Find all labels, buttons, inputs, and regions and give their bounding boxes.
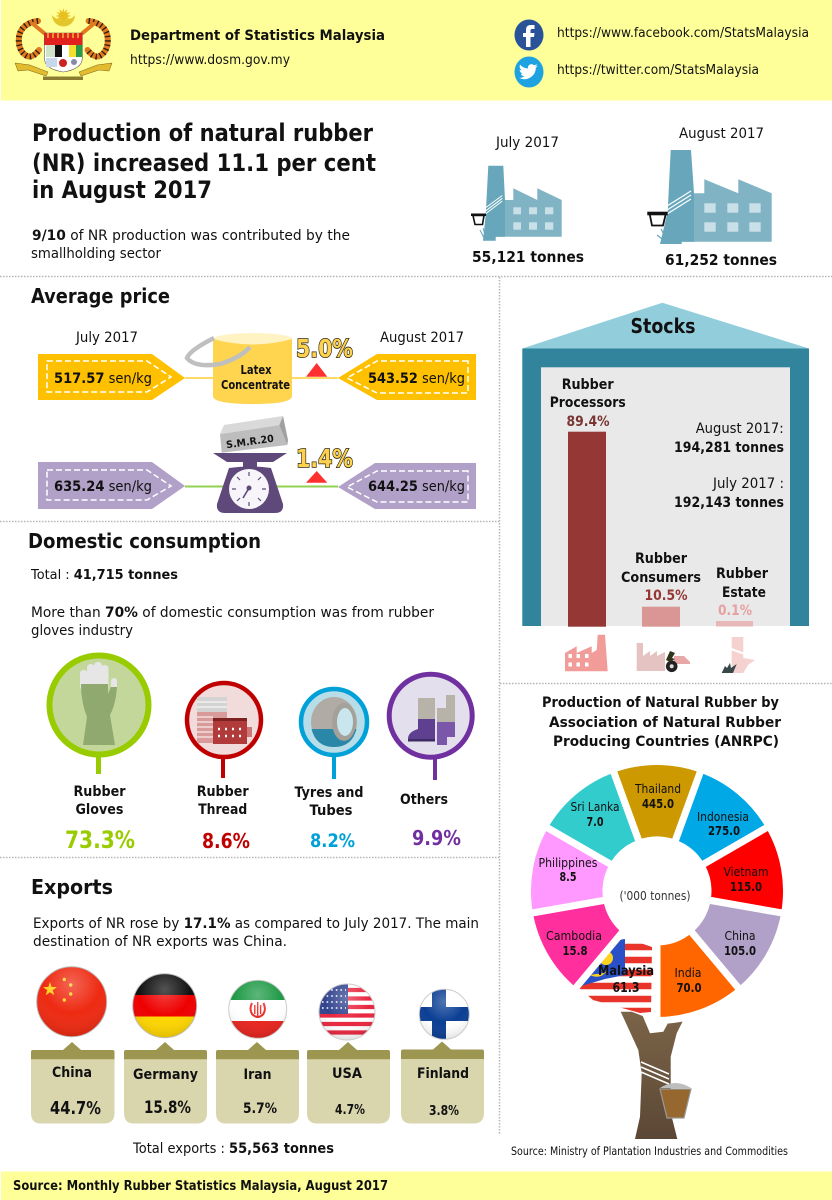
segment: Thailand	[613, 761, 701, 843]
bar: rubber processors	[568, 432, 606, 627]
label: rubber thread: Rubber	[197, 784, 249, 800]
panel: average price	[31, 284, 476, 513]
segment: Sri Lanka	[540, 763, 660, 883]
icon: rubber block on scale	[213, 416, 288, 513]
panel: stocks warehouse	[522, 303, 809, 673]
label: Vietnam: 115.0	[730, 879, 762, 894]
card: Finland	[401, 1042, 484, 1124]
heading: ANRPC production: Production of Natural Rubber by	[542, 695, 779, 711]
label: India	[674, 965, 702, 995]
icon: processors factory	[565, 635, 608, 671]
flag: China	[36, 966, 108, 1038]
label: India: India	[674, 965, 702, 980]
label: July 2017 price: July 2017	[75, 330, 138, 346]
heading: ANRPC production: Association of Natural Rubber	[549, 715, 782, 731]
label: tyres and tubes: Tubes	[310, 803, 352, 819]
sub-headline: smallholding share: 9/10 of NR production was contributed by the	[32, 228, 350, 244]
panel: ANRPC production	[511, 695, 792, 1158]
card: Iran	[216, 1042, 299, 1124]
label: Philippines: Philippines	[538, 855, 598, 870]
label: Indonesia	[697, 809, 749, 838]
label: Sri Lanka: Sri Lanka	[570, 799, 620, 814]
label: Malaysia: 61.3	[612, 981, 640, 996]
icon: factory August	[647, 150, 772, 244]
tag: SMR20 July: 635.24 sen/kg	[54, 479, 152, 495]
text: exports summary: destination of NR exports was China.	[33, 934, 287, 950]
text: July stocks	[674, 476, 784, 511]
footer band: Source: Monthly Rubber Statistics Malaysia, August 2017	[13, 1178, 388, 1194]
label: rubber estate: Rubber	[716, 566, 768, 582]
card: China: 44.7%	[50, 1098, 101, 1119]
label: rubber gloves: Gloves	[76, 802, 124, 818]
change: SMR20 up 1.4%	[296, 444, 353, 483]
label: rubber processors	[550, 377, 626, 430]
label: rubber processors: Processors	[550, 395, 626, 411]
label: tyres and tubes	[294, 785, 364, 819]
segment: Malaysia flag	[580, 939, 652, 1013]
icon: factory July	[471, 166, 562, 241]
label: India: 70.0	[676, 980, 702, 995]
headline: Production of natural rubber	[32, 119, 373, 147]
text: exports summary	[33, 916, 479, 950]
tag: SMR20 August: 644.25 sen/kg	[368, 479, 465, 495]
label: August 2017 production: August 2017	[679, 126, 764, 142]
segment: Vietnam	[696, 825, 792, 926]
label: others: Others	[400, 792, 448, 808]
footer band	[1, 1172, 832, 1200]
card: USA: 4.7%	[335, 1103, 365, 1118]
value: tyres 8.2%: 8.2%	[310, 830, 355, 852]
value: August production: 61,252 tonnes	[665, 251, 777, 269]
flag: Iran	[228, 980, 288, 1041]
label: rubber processors: 89.4%	[566, 414, 610, 430]
label: rubber processors: Rubber	[562, 377, 614, 393]
card: Iran: 5.7%	[243, 1101, 277, 1117]
text: August stocks: 194,281 tonnes	[674, 440, 784, 456]
text: July stocks: 192,143 tonnes	[674, 495, 784, 511]
segment: India	[632, 921, 743, 1028]
label: rubber estate: Estate	[722, 585, 766, 601]
label: Cambodia	[546, 928, 602, 958]
headline: (NR) increased 11.1 per cent	[32, 149, 376, 177]
segment: China	[676, 877, 791, 994]
bar: rubber consumers	[642, 607, 680, 627]
icon: rubber block on scale: S.M.R.20	[226, 434, 275, 451]
label: Cambodia: 15.8	[562, 943, 588, 958]
total exports: Total exports : 55,563 tonnes	[132, 1141, 334, 1157]
icon: tyres and tubes	[301, 689, 367, 779]
tag: latex July	[38, 354, 185, 400]
label: rubber thread: Thread	[198, 802, 247, 818]
segment: Cambodia	[523, 877, 638, 994]
card: USA	[307, 1042, 390, 1124]
tag: SMR20 July	[38, 462, 185, 509]
total consumption: Total : 41,715 tonnes	[30, 567, 178, 583]
icon: facebook	[514, 20, 544, 50]
flag: USA	[318, 984, 376, 1040]
flag: Finland	[419, 989, 470, 1040]
icon: other rubber products	[389, 674, 472, 780]
label: rubber thread	[197, 784, 249, 818]
text: gloves share	[31, 605, 434, 639]
label: Philippines: 8.5	[560, 869, 576, 884]
donut chart	[522, 761, 792, 1028]
label: Thailand	[634, 781, 681, 811]
headline: in August 2017	[32, 176, 212, 204]
card: Germany	[124, 1042, 207, 1124]
text: gloves share: gloves industry	[31, 623, 133, 639]
icon: consumers factory and tyre	[637, 643, 690, 672]
label: rubber consumers: 10.5%	[644, 588, 688, 604]
header band	[1, 0, 832, 100]
label: rubber consumers: Rubber	[635, 551, 687, 567]
label: Vietnam: Vietnam	[724, 864, 768, 879]
panel: domestic consumption	[28, 529, 472, 854]
value: others 9.9%: 9.9%	[412, 826, 461, 850]
card: Finland: 3.8%	[429, 1104, 459, 1119]
headline	[32, 119, 376, 204]
tag: latex July: 517.57 sen/kg	[54, 371, 152, 387]
tag: latex August	[338, 354, 476, 400]
label: rubber consumers	[621, 551, 701, 604]
card: Finland: Finland	[417, 1066, 469, 1082]
change: latex up 5.0%: 5.0%	[296, 334, 353, 363]
connector: SMR 20	[185, 486, 338, 488]
heading: domestic consumption: Domestic consumption	[28, 529, 261, 553]
label: Vietnam	[724, 864, 768, 894]
warehouse roof	[522, 303, 809, 348]
icon: rubber tree trunk	[621, 1012, 691, 1139]
flag: Germany	[132, 973, 198, 1038]
label: rubber consumers: Consumers	[621, 570, 701, 586]
warehouse frame	[522, 348, 809, 626]
card: USA: USA	[332, 1066, 362, 1082]
label: Sri Lanka: 7.0	[586, 814, 604, 829]
card: Germany: 15.8%	[144, 1098, 191, 1117]
facebook link: https://www.facebook.com/StatsMalaysia	[557, 26, 809, 41]
label: China: China	[724, 928, 756, 943]
label: August 2017 price: August 2017	[380, 330, 464, 346]
label: Thailand: 445.0	[642, 796, 674, 811]
value: gloves 73.3%: 73.3%	[65, 826, 135, 854]
icon: Malaysia coat of arms	[15, 8, 112, 80]
icon: estate tree	[722, 637, 755, 673]
segment: Indonesia	[654, 763, 774, 883]
label: rubber estate: 0.1%	[718, 603, 752, 619]
sub-headline: smallholding share	[31, 228, 350, 262]
heading: exports: Exports	[31, 875, 113, 899]
bar: rubber estate	[716, 621, 753, 626]
tag: latex August: 543.52 sen/kg	[368, 371, 465, 387]
card: Germany: Germany	[133, 1067, 198, 1083]
icon: twitter	[514, 56, 544, 88]
change: latex up 5.0%	[296, 334, 353, 377]
label: Philippines	[538, 855, 598, 884]
heading: ANRPC production: Producing Countries (ANRPC)	[553, 734, 779, 750]
label: China: 105.0	[724, 943, 756, 958]
label: rubber estate	[716, 566, 768, 619]
label: Malaysia: Malaysia	[598, 964, 654, 979]
heading: average price: Average price	[31, 284, 170, 308]
icon: rubber gloves	[50, 656, 148, 774]
warehouse interior	[541, 367, 790, 626]
segment: Philippines	[522, 825, 618, 926]
change: SMR20 up 1.4%: 1.4%	[296, 444, 353, 473]
label: Cambodia: Cambodia	[546, 928, 602, 943]
label: Sri Lanka	[570, 799, 620, 829]
unit label: ('000 tonnes)	[620, 889, 690, 903]
twitter link: https://twitter.com/StatsMalaysia	[557, 63, 759, 78]
value: July production: 55,121 tonnes	[472, 248, 584, 266]
text: July stocks: July 2017 :	[712, 476, 784, 492]
label: tyres and tubes: Tyres and	[294, 785, 364, 801]
icon: latex bucket: Latex	[240, 363, 272, 377]
heading: ANRPC production	[542, 695, 782, 750]
panel: exports	[31, 875, 484, 1157]
tag: SMR20 August	[338, 463, 476, 509]
text: exports summary: Exports of NR rose by 17.1% as compared to July 2017. The main	[33, 916, 479, 932]
label: Thailand: Thailand	[634, 781, 681, 796]
label: Indonesia: 275.0	[708, 823, 740, 838]
sub-headline: smallholding share: smallholding sector	[31, 246, 161, 262]
card: China	[31, 1042, 114, 1124]
department website: https://www.dosm.gov.my	[130, 53, 290, 68]
card: Iran: Iran	[244, 1067, 272, 1083]
value: thread 8.6%: 8.6%	[202, 829, 250, 853]
card: China: China	[52, 1065, 92, 1081]
icon: rubber thread	[187, 683, 261, 778]
label: Malaysia	[598, 964, 654, 996]
label: rubber gloves	[74, 784, 126, 818]
icon: latex bucket	[187, 333, 292, 404]
text: August stocks: August 2017:	[696, 421, 784, 437]
label: China	[724, 928, 756, 958]
text: August stocks	[674, 421, 784, 456]
label: Indonesia: Indonesia	[697, 809, 749, 824]
heading: stocks: Stocks	[630, 314, 696, 338]
icon: latex bucket: Concentrate	[221, 378, 290, 392]
department name: Department of Statistics Malaysia	[130, 28, 385, 44]
label: July 2017 production: July 2017	[495, 135, 559, 151]
label: rubber gloves: Rubber	[74, 784, 126, 800]
connector: latex	[185, 377, 338, 379]
text: gloves share: More than 70% of domestic consumption was from rubber	[31, 605, 434, 621]
